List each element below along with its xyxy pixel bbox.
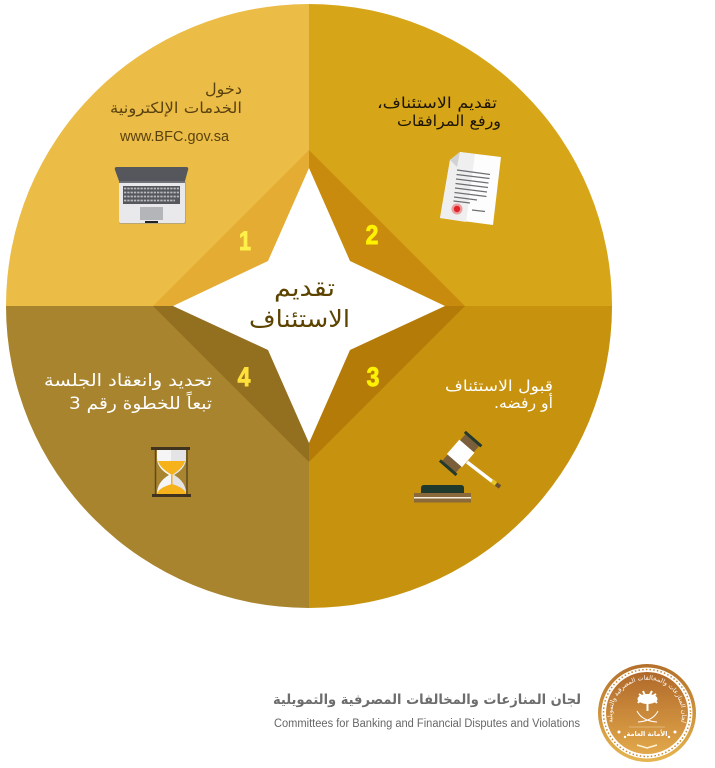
step 3 inner triangle: [309, 306, 465, 462]
panel: step 4 quadrant: [6, 306, 309, 608]
number 4: 4: [238, 362, 250, 392]
centre title: الاستئناف: [249, 305, 350, 333]
text: step 4: تحديد وانعقاد الجلسة: [44, 371, 212, 391]
number 1: 1: [239, 227, 251, 257]
centre title: تقديم: [274, 274, 335, 302]
text: step 1: الخدمات الإلكترونية: [110, 99, 242, 117]
footer organisation name: [273, 692, 581, 730]
text: step 2: ورفع المرافقات: [397, 112, 501, 130]
panel: step 1 quadrant: [6, 4, 309, 306]
text: step 2: تقديم الاستئناف،: [377, 94, 497, 112]
text: step 4: تبعاً للخطوة رقم 3: [69, 390, 212, 414]
number 3: 3: [367, 362, 379, 392]
step 1 inner triangle: [153, 150, 309, 306]
text: step 3: أو رفضه.: [494, 393, 553, 412]
palm and swords emblem: [637, 691, 658, 722]
icon: hourglass: [151, 447, 191, 497]
step 4 inner triangle: [153, 306, 309, 462]
icon: judge gavel: [414, 431, 500, 502]
centre white star: [173, 168, 445, 443]
panel: step 3 quadrant: [309, 306, 612, 608]
text: step 1: دخول: [205, 80, 242, 98]
text: step 4: [44, 371, 212, 414]
logo seal: [598, 664, 696, 762]
footer organisation name: لجان المنازعات والمخالفات المصرفية والتمويلية: [273, 692, 581, 708]
footer organisation name: Committees for Banking and Financial Disputes and Violations: [274, 718, 580, 730]
icon: document with seal: [440, 152, 501, 225]
panel: step 2 quadrant: [309, 4, 612, 306]
text: step 2: [377, 94, 501, 130]
text: step 1: www.BFC.gov.sa: [119, 128, 230, 145]
number 2: 2: [366, 220, 378, 250]
seal ring text: لجان المنازعات والمخالفات المصرفية والتمويلية: [607, 675, 687, 723]
logo seal: الأمانة العامة: [627, 729, 667, 738]
seal dots: [618, 730, 676, 738]
icon: laptop: [115, 167, 188, 224]
text: step 3: [445, 377, 553, 412]
centre title: [249, 274, 350, 333]
text: step 1: [110, 80, 242, 145]
step 2 inner triangle: [309, 150, 465, 306]
text: step 3: قبول الاستئناف: [445, 377, 553, 395]
